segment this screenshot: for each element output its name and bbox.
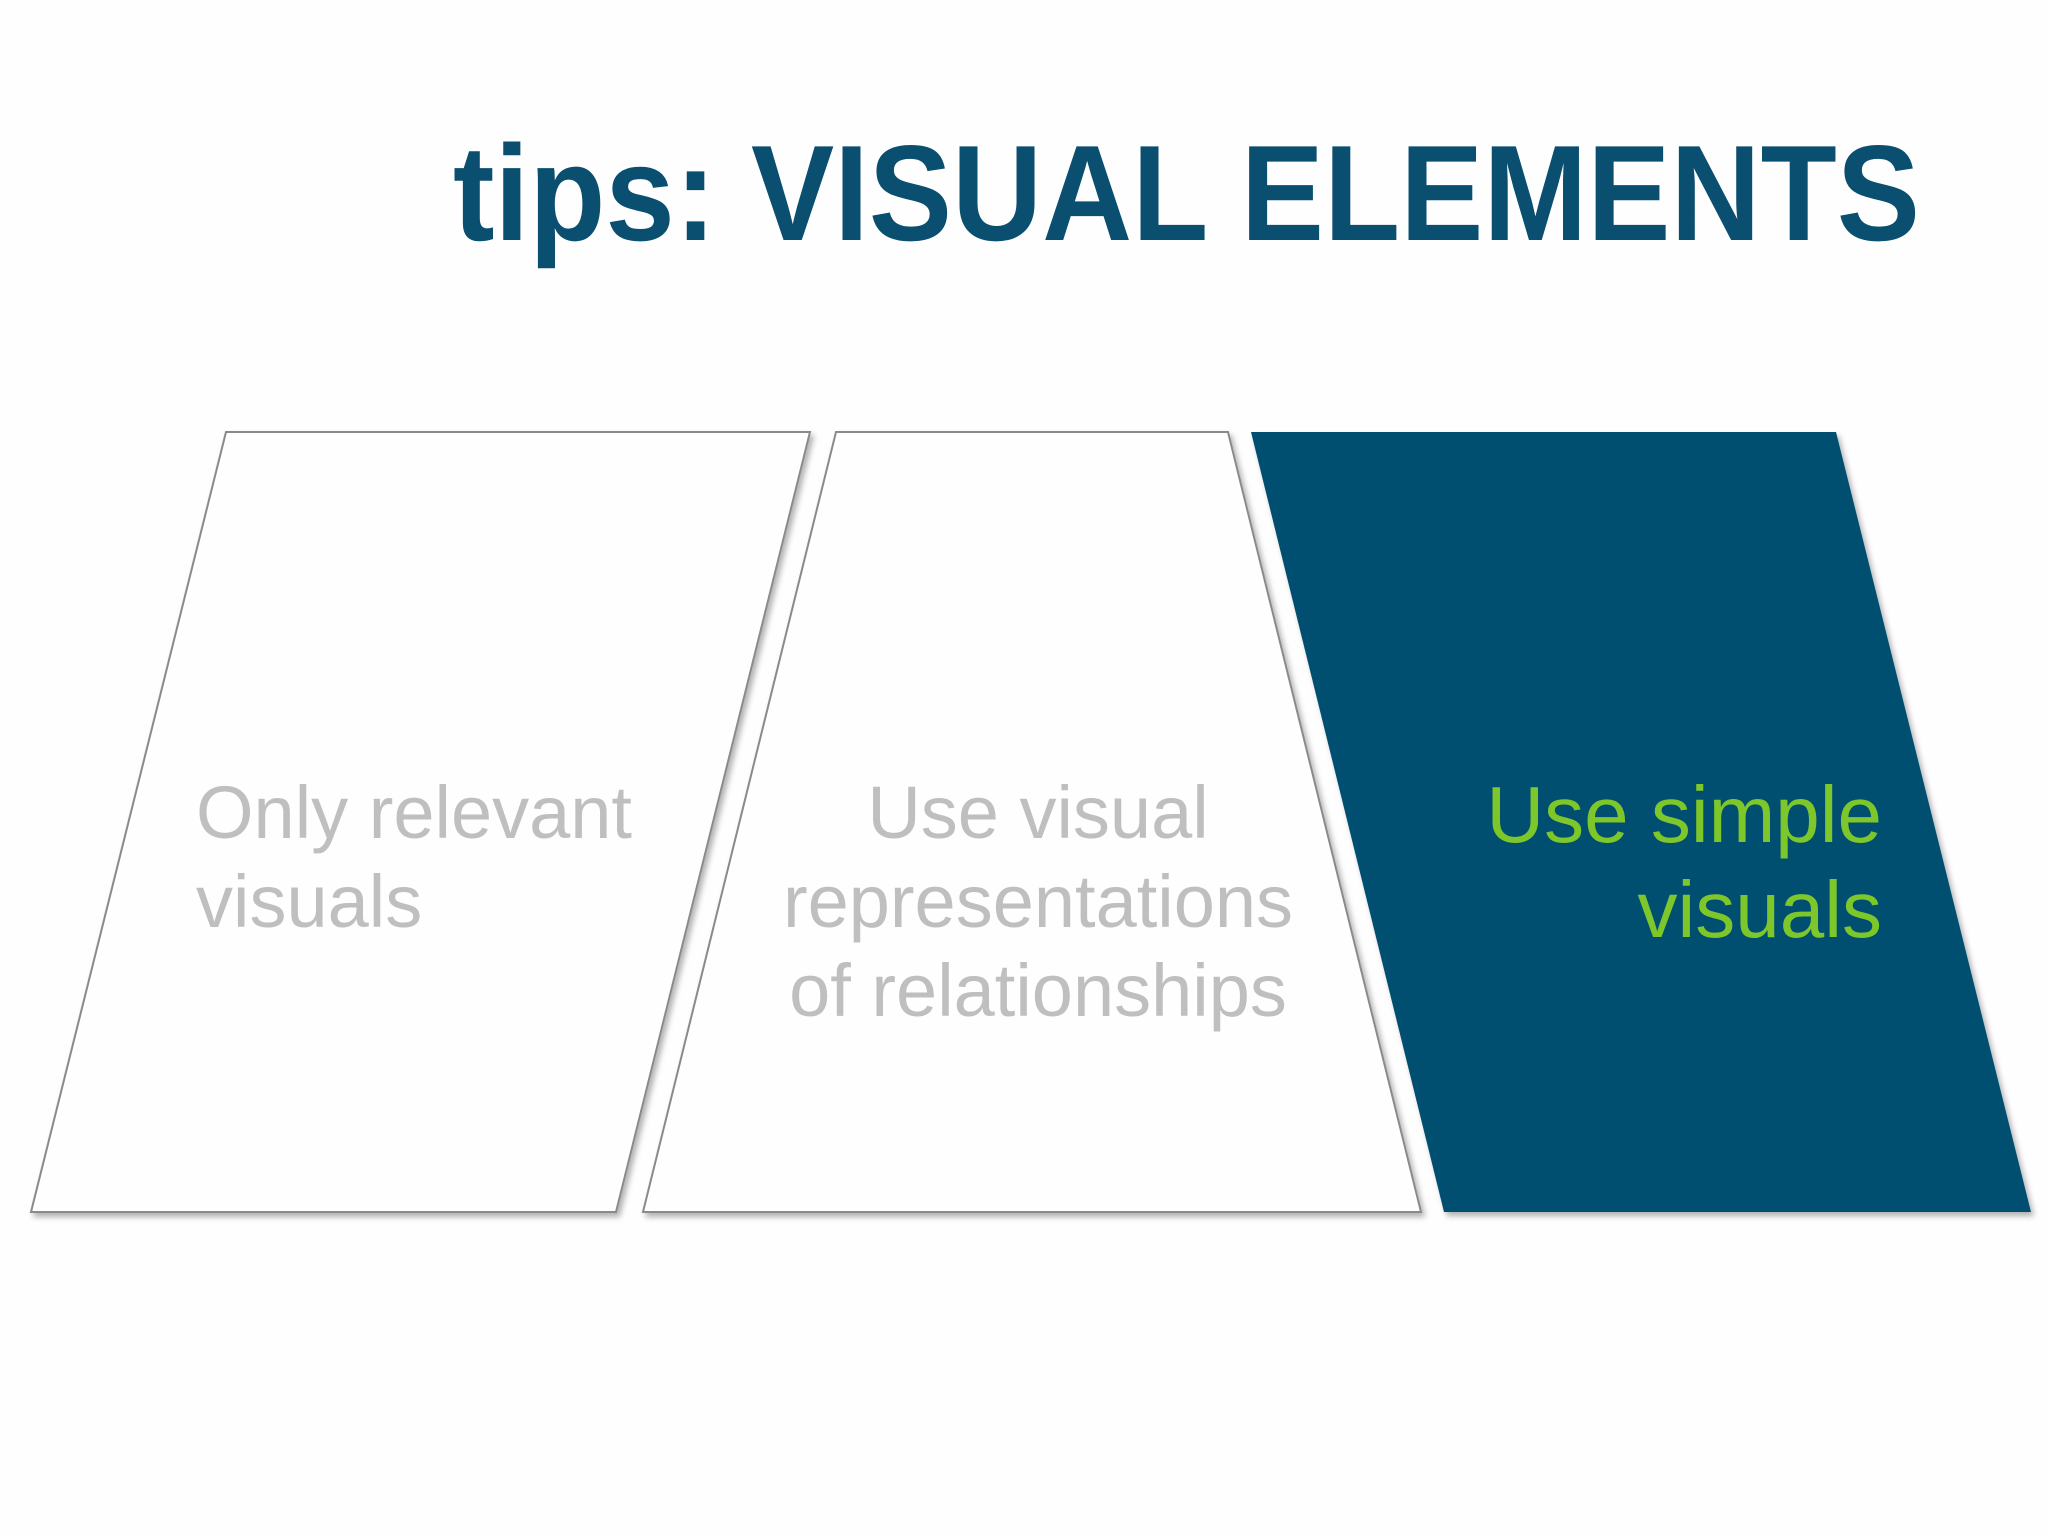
text: only relevant visuals: Only relevant [196, 771, 632, 854]
panel: use simple visuals [1251, 432, 2031, 1212]
text: use visual representations of relationships: representations [783, 860, 1293, 943]
text: use simple visuals: Use simple [1486, 770, 1882, 859]
title: tips: VISUAL ELEMENTS [453, 117, 1920, 269]
text: only relevant visuals: visuals [196, 860, 422, 943]
panel: use visual representations [643, 432, 1421, 1212]
text: use visual representations of relationships: Use visual [867, 771, 1209, 854]
panel: only relevant visuals [31, 432, 810, 1212]
text: use visual representations of relationships: of relationships [789, 949, 1287, 1032]
text: use simple visuals: visuals [1637, 865, 1882, 954]
